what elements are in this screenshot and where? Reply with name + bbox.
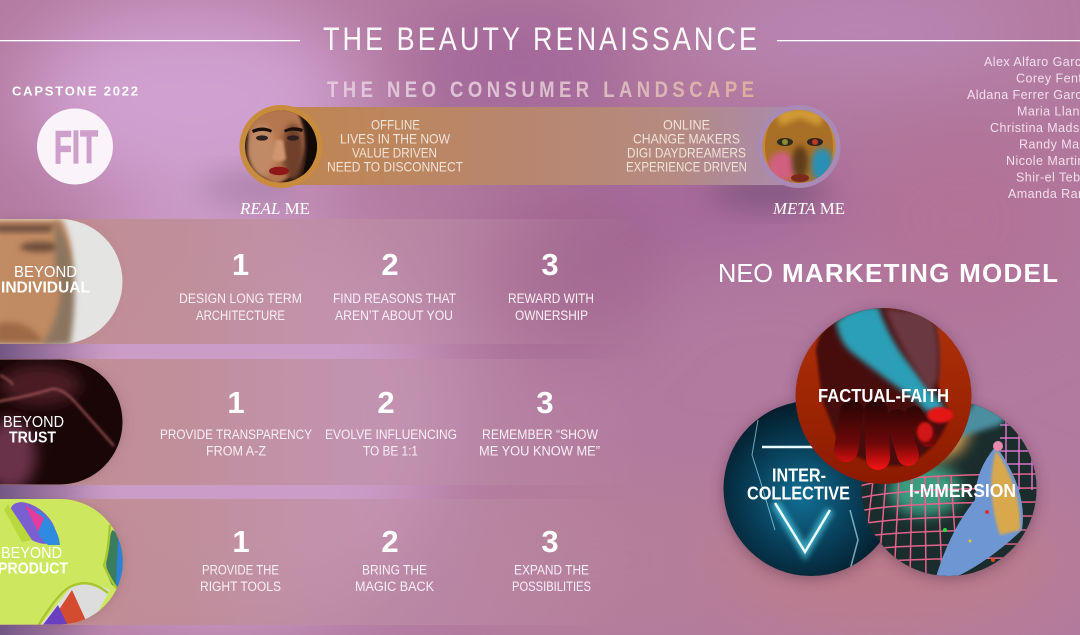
team names [967,55,1080,201]
step 3 [479,385,600,458]
real me label: REAL ME [239,199,310,218]
pill label: BEYOND [14,264,77,281]
step 1: DESIGN LONG TERM [179,291,302,306]
FIT logo: FIT [54,121,98,173]
pill label: BEYOND [3,414,64,431]
circle: factual-faith [796,306,972,484]
pill label [1,264,90,296]
heading: neo marketing model: MARKETING MODEL [782,258,1058,288]
FIT logo [37,108,113,184]
meta me traits [626,116,747,175]
step 3: 3 [536,385,554,420]
label: I-MMERSION [909,481,1016,501]
pill image: blurred portrait [0,219,130,345]
label: INTER- [772,466,826,486]
title: THE BEAUTY RENAISSANCE [323,22,757,58]
row panel: beyond trust [0,359,640,491]
step 1: 1 [232,524,250,559]
step 3: ME YOU KNOW ME” [479,444,600,458]
step 3: EXPAND THE [514,562,589,578]
step 3: OWNERSHIP [515,308,588,323]
step 1 [179,247,302,323]
meta me traits: DIGI DAYDREAMERS [627,145,746,161]
step 1: 1 [227,385,245,420]
pill label: BEYOND [1,545,62,562]
circle: inter-collective [724,402,880,576]
step 3: REMEMBER “SHOW [482,427,598,442]
circle: i-mmersion [860,395,1040,580]
title rule right [777,40,1080,41]
step 3 [512,524,591,594]
step 1: PROVIDE TRANSPARENCY [160,427,312,442]
step 2: FIND REASONS THAT [333,291,456,306]
label: COLLECTIVE [747,483,850,503]
avatar: real me [240,105,325,189]
gap shading between rows [0,344,130,635]
step 2: 2 [381,524,399,559]
venn diagram [723,306,1040,580]
step 3 [508,247,594,323]
step 3: 3 [541,524,559,559]
title rule left [0,40,300,41]
step 2: TO BE 1:1 [363,444,418,458]
step 3: POSSIBILITIES [512,579,591,594]
real me traits: VALUE DRIVEN [352,145,437,161]
avatar: meta me [758,104,840,188]
real me traits [327,116,463,175]
step 1: PROVIDE THE [202,562,279,578]
step 2: 2 [381,247,399,282]
real me traits: OFFLINE [371,116,420,132]
step 2 [355,524,434,594]
step 3: 3 [541,247,559,282]
pill label: TRUST [9,430,56,446]
step 1 [200,524,281,594]
pill label: INDIVIDUAL [1,280,90,296]
step 2: AREN’T ABOUT YOU [335,308,453,323]
pill image: neon garment [0,494,130,626]
step 2 [325,385,457,458]
row panel: beyond individual [0,219,640,345]
consumer band [281,107,799,185]
heading: neo marketing model: NEO [718,258,773,288]
subtitle: THE NEO CONSUMER LANDSCAPE [327,79,754,102]
meta me label: META ME [772,199,845,218]
step 1: FROM A-Z [206,444,266,458]
step 2: EVOLVE INFLUENCING [325,427,457,442]
label [747,466,850,503]
step 1: ARCHITECTURE [196,308,285,323]
label: FACTUAL-FAITH [818,386,949,406]
row panel: beyond product [0,498,590,626]
step 2 [333,247,456,323]
pill label [3,414,64,446]
step 1 [160,385,312,458]
real me traits: LIVES IN THE NOW [340,131,451,147]
meta me traits: CHANGE MAKERS [633,131,740,147]
step 1: RIGHT TOOLS [200,579,281,594]
shadow [723,311,1037,579]
step 1: 1 [232,247,249,282]
step 2: MAGIC BACK [355,579,434,594]
real me traits: NEED TO DISCONNECT [327,159,463,175]
step 2: BRING THE [362,562,427,578]
pill label [0,545,68,578]
step 3: REWARD WITH [508,291,594,306]
step 2: 2 [377,385,395,420]
meta me traits: EXPERIENCE DRIVEN [626,159,747,175]
pill label: PRODUCT [0,560,68,578]
capstone label: CAPSTONE 2022 [12,84,138,98]
meta me traits: ONLINE [663,116,710,132]
pill image: dark light streak [0,360,122,484]
